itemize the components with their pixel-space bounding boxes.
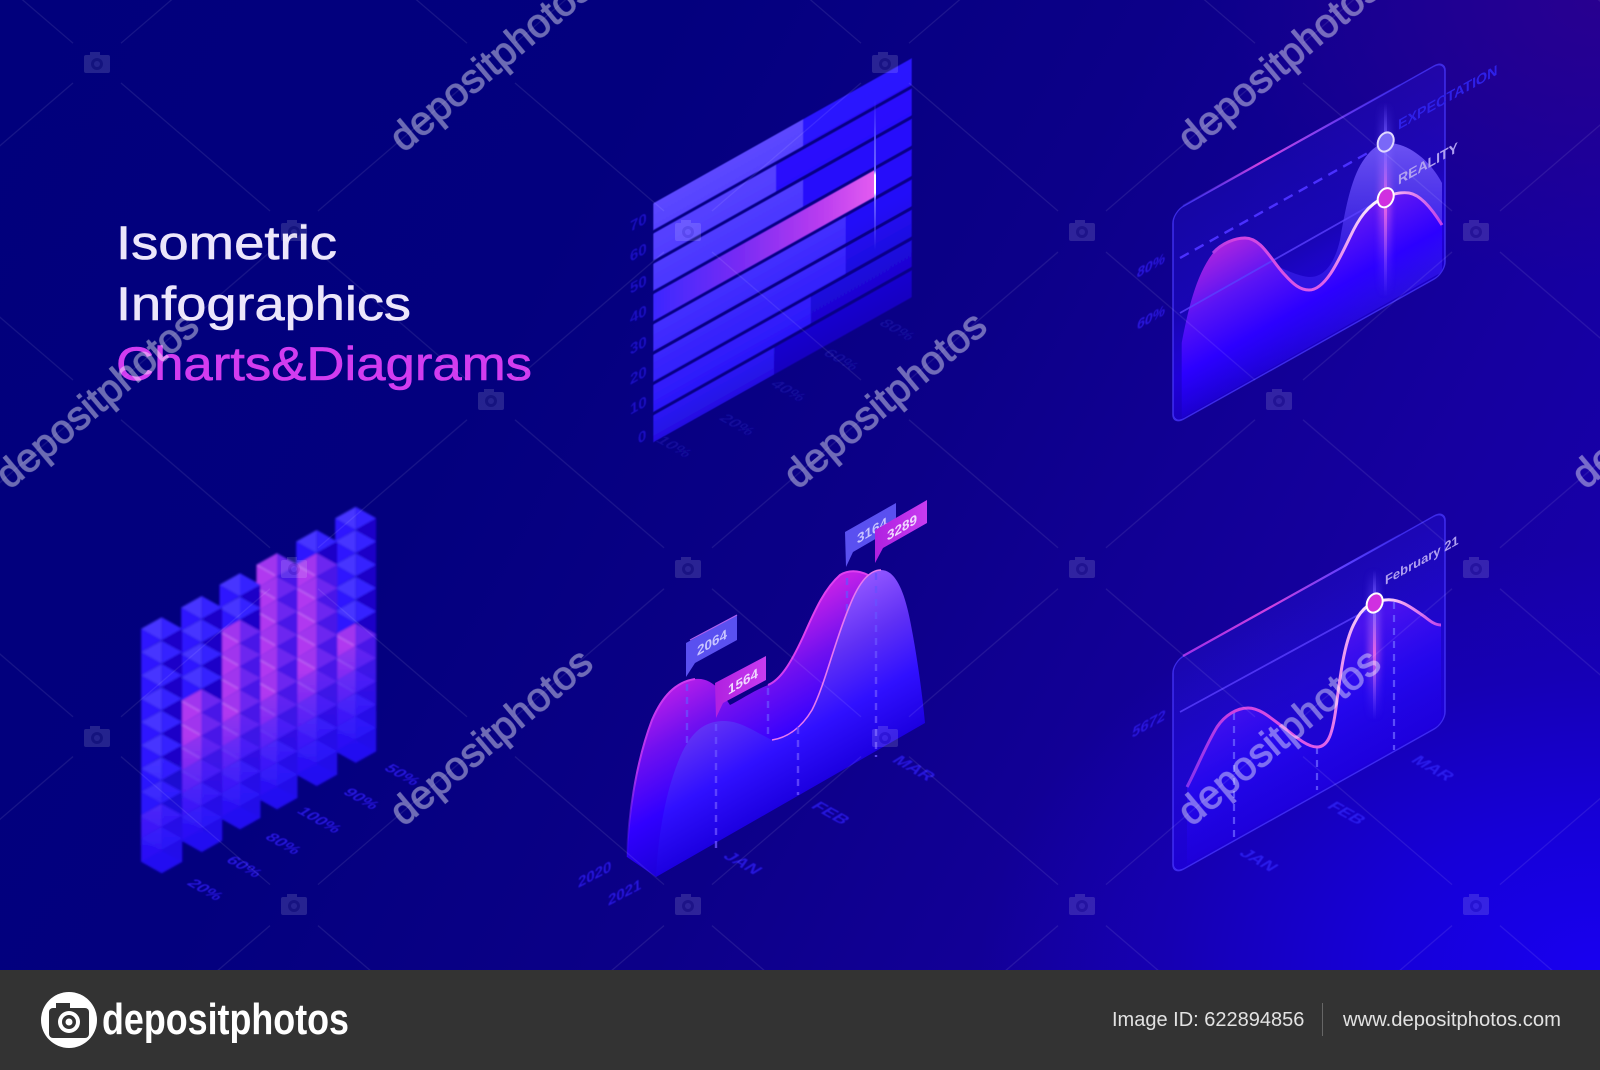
highlight line bbox=[874, 100, 876, 250]
site url: www.depositphotos.com bbox=[1342, 1009, 1561, 1031]
panel: two-year area chart bbox=[578, 500, 941, 910]
curve bbox=[1187, 600, 1441, 787]
month labels: MAR bbox=[888, 753, 941, 784]
watermark text: depositphotos bbox=[775, 303, 995, 497]
percent labels: 80% bbox=[261, 830, 306, 857]
area fill bbox=[1187, 600, 1441, 864]
x axis labels: 80% bbox=[875, 316, 920, 343]
x axis labels: 10% bbox=[652, 433, 697, 460]
footer logo text: depositphotos bbox=[102, 995, 349, 1044]
dashes 2021 bbox=[716, 573, 876, 848]
vertical glow bbox=[1368, 570, 1380, 720]
vertical glow bbox=[1379, 103, 1391, 297]
y axis labels: 40 bbox=[630, 302, 647, 328]
x axis labels: 40% bbox=[766, 377, 811, 404]
title bbox=[116, 216, 532, 390]
x axis labels: 20% bbox=[715, 411, 760, 438]
title line: Infographics: Infographics bbox=[116, 277, 411, 330]
flag 1564: 1564 bbox=[728, 665, 759, 699]
dashed month guides bbox=[1234, 602, 1394, 843]
pink top edge bbox=[1183, 535, 1400, 656]
y axis labels: 70 bbox=[630, 210, 647, 236]
month labels bbox=[719, 753, 941, 877]
expectation area bbox=[1182, 143, 1442, 418]
axis label 80%: 80% bbox=[1137, 250, 1165, 282]
panel card bbox=[1173, 510, 1445, 875]
cube stacks bbox=[141, 507, 376, 873]
image id: Image ID: 622894856 bbox=[1112, 1009, 1304, 1031]
axis label 60%: 60% bbox=[1137, 302, 1165, 334]
flag 3164: 3164 bbox=[857, 514, 888, 548]
pink top edge bbox=[1183, 85, 1400, 206]
y axis labels: 10 bbox=[630, 393, 647, 419]
month labels: JAN bbox=[719, 849, 767, 877]
percent labels: 60% bbox=[222, 853, 267, 880]
bars bbox=[653, 58, 912, 442]
y axis labels: 60 bbox=[630, 240, 647, 266]
edge 2021 bbox=[772, 570, 881, 740]
percent labels: 100% bbox=[293, 804, 347, 836]
watermark camera icons bbox=[84, 52, 1489, 915]
x axis labels bbox=[652, 316, 920, 460]
flag 3289: 3289 bbox=[887, 512, 917, 545]
edge 2020 bbox=[627, 571, 868, 857]
year labels: 2020 bbox=[578, 858, 611, 892]
y axis labels: 0 bbox=[638, 426, 646, 448]
label: reality: REALITY bbox=[1398, 139, 1458, 189]
watermark text: depositphotos bbox=[381, 640, 601, 834]
y axis labels bbox=[630, 210, 647, 448]
panel card bbox=[1173, 60, 1445, 425]
percent labels: 50% bbox=[380, 761, 425, 788]
dashes 2020 bbox=[687, 578, 847, 830]
flag 1564 bbox=[715, 656, 766, 718]
watermark text: depositphotos bbox=[1169, 640, 1389, 834]
flag 2064 bbox=[686, 615, 737, 677]
y axis labels: 50 bbox=[630, 272, 647, 298]
area 2021 bbox=[656, 570, 925, 877]
dashed 80% guide bbox=[1180, 150, 1373, 258]
month labels bbox=[1235, 753, 1460, 874]
flag 2064: 2064 bbox=[697, 626, 728, 660]
flag 3289 bbox=[875, 500, 927, 563]
percent labels bbox=[183, 761, 425, 903]
label: expectation: EXPECTATION bbox=[1398, 62, 1497, 134]
reality area bbox=[1182, 193, 1442, 418]
marker: reality bbox=[1375, 185, 1397, 210]
percent labels: 90% bbox=[339, 785, 384, 812]
x axis labels: 60% bbox=[819, 346, 864, 373]
footer logo icon bbox=[41, 992, 97, 1048]
title line: Isometric: Isometric bbox=[116, 216, 337, 269]
date label: February 21 bbox=[1385, 532, 1459, 588]
month labels: MAR bbox=[1407, 753, 1460, 784]
watermark text bbox=[0, 0, 1600, 834]
area 2020 bbox=[627, 571, 900, 877]
flag 3164 bbox=[845, 503, 896, 567]
guide line bbox=[1180, 603, 1380, 712]
marker: expectation bbox=[1375, 130, 1397, 154]
panel: isometric cube columns bbox=[141, 507, 425, 903]
year labels: 2021 bbox=[608, 876, 641, 910]
axis label 5672: 5672 bbox=[1132, 706, 1165, 742]
footer bar bbox=[0, 970, 1600, 1070]
year labels bbox=[578, 858, 641, 910]
y axis labels: 30 bbox=[630, 333, 647, 359]
month labels: JAN bbox=[1235, 846, 1283, 874]
reality curve bbox=[1213, 193, 1442, 290]
panel: expectation vs reality line chart bbox=[1137, 60, 1497, 425]
60% guide bbox=[1180, 200, 1380, 313]
percent labels: 20% bbox=[183, 876, 228, 903]
marker bbox=[1364, 591, 1386, 615]
panel: february line chart bbox=[1132, 510, 1460, 875]
y axis labels: 20 bbox=[630, 363, 647, 389]
month labels: FEB bbox=[1323, 799, 1371, 827]
title line: Charts&Diagrams: Charts&Diagrams bbox=[116, 337, 532, 390]
month labels: FEB bbox=[807, 799, 855, 827]
panel: isometric horizontal bar chart bbox=[630, 58, 920, 460]
